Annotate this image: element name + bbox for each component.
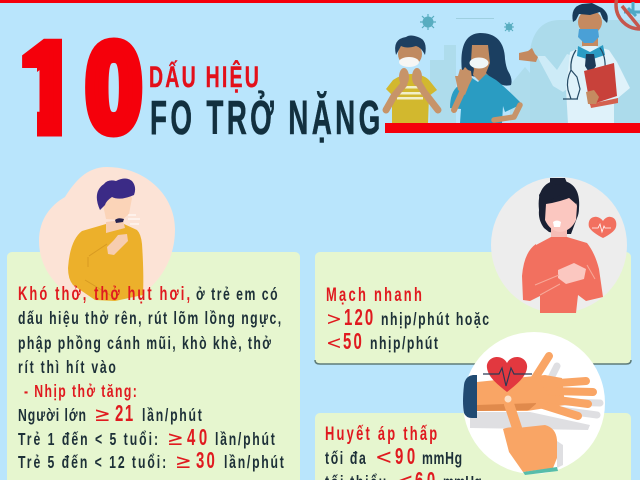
figure: woman with mask [450,33,522,123]
panel bottom edge [315,360,631,364]
panel: low blood pressure [315,332,631,480]
title number 10 [22,38,142,138]
panel background [315,252,631,364]
text: child 1 to 5 rate [18,425,275,451]
icon: virus left [420,14,436,30]
text: pulse high: > [326,308,342,330]
icon: no virus sign [616,0,640,29]
text: pulse low: 50 [343,329,362,355]
panel background [315,413,631,480]
text: child 5 to 12 rate: ≥ [175,449,192,473]
panel: breathing [7,167,300,480]
text: pulse heading: Mạch nhanh [326,285,422,306]
text: systolic [325,444,462,470]
text: child 5 to 12 rate [18,448,284,474]
text: adult rate: 21 [115,401,133,427]
illustration: man short of breath [39,167,175,301]
illustration: checking wrist pulse [463,332,605,475]
text: child 1 to 5 rate: ≥ [167,426,184,450]
text: systolic: < [375,445,393,469]
text: systolic: tối đa [325,449,366,469]
title line 2: FO TRỞ NẶNG [150,91,380,145]
text: pulse low: < [326,332,342,354]
text: adult rate: lần/phút [142,406,202,426]
text: adult rate: ≥ [94,402,111,426]
text: blood pressure heading: Huyết áp thấp [325,424,437,445]
text: main symptom: ở trẻ em có [196,285,278,305]
title number 10: 0 [86,18,142,157]
text: child 1 to 5 rate: lần/phút [215,430,275,450]
text: breathing rate heading: - Nhịp thở tăng: [24,382,137,402]
text: main symptom [18,284,281,378]
text: child 5 to 12 rate: 30 [196,448,215,474]
text: systolic: 90 [395,444,415,470]
text: pulse high: nhịp/phút hoặc [381,310,489,330]
text: adult rate [18,401,202,427]
text: main symptom: dấu hiệu thở rên, rút lõm lồng ngực, [18,309,281,329]
figure: boy with mask [386,36,438,123]
text: child 1 to 5 rate: 40 [187,425,207,451]
text: child 1 to 5 rate: Trẻ 1 đến < 5 tuổi: [18,430,158,450]
text: pulse low [326,329,438,355]
text: child 5 to 12 rate: lần/phút [224,453,284,473]
scene backdrop [430,18,640,123]
panel background [7,252,300,480]
illustration: woman holding chest [491,177,627,313]
text: pulse high [326,305,489,331]
icon: heart with pulse [589,217,616,238]
header red bar [385,123,640,133]
title line 1: DẤU HIỆU [149,59,259,94]
text: main symptom: phập phồng cánh mũi, khò khè, thở [18,334,271,354]
text: main symptom: rít thì hít vào [18,358,116,378]
title number 10: 1 [20,20,79,157]
text: adult rate: Người lớn [18,406,86,426]
text: child 5 to 12 rate: Trẻ 5 đến < 12 tuổi: [18,453,166,473]
top red bar [0,0,640,3]
text: pulse high: 120 [344,305,373,331]
text: systolic: mmHg [422,449,462,469]
panel: fast pulse [315,177,631,364]
title [22,38,379,143]
header illustration: patients and doctor [386,0,640,124]
icon: virus right [504,22,514,32]
text: pulse low: nhịp/phút [370,334,438,354]
text: diastolic [325,468,482,480]
text: main symptom: Khó thở, thở hụt hơi, [18,284,190,305]
figure: doctor with clipboard [519,3,630,124]
